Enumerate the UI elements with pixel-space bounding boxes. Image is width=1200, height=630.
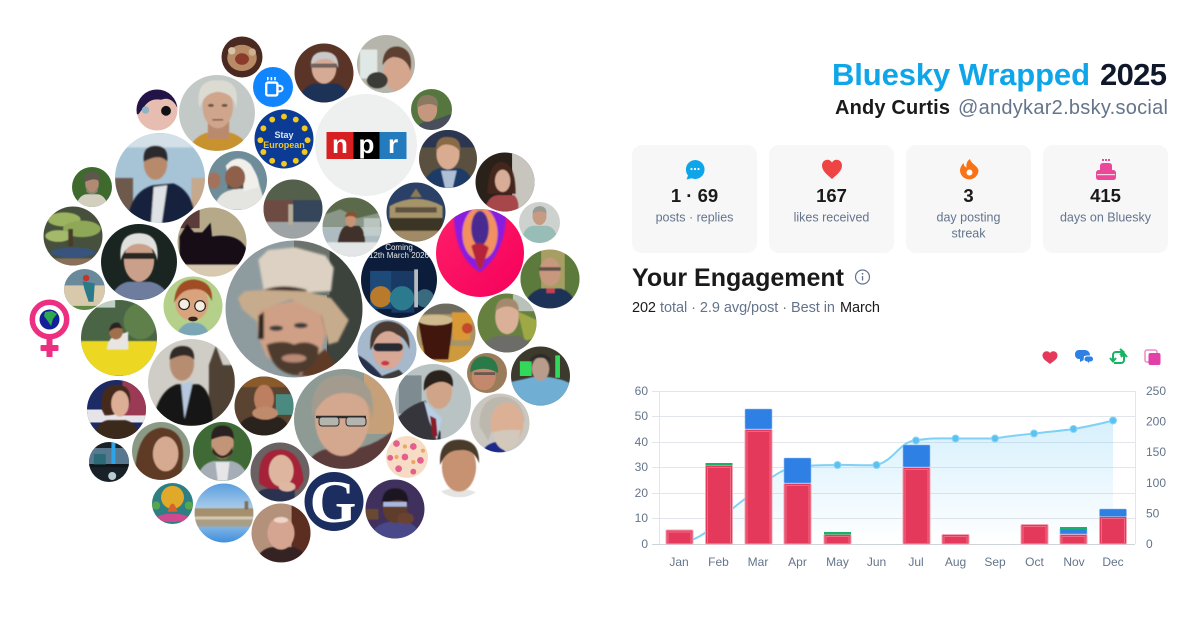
cumulative line bbox=[679, 420, 1113, 544]
avatar: NPR logo: n bbox=[332, 129, 348, 159]
panel: posts and replies stat bbox=[632, 145, 757, 253]
icon: likes heart bbox=[1042, 351, 1058, 364]
avatar: book cover Coming March 2026: Coming bbox=[385, 243, 413, 252]
avatar: grey-haired man in mustard shirt bbox=[179, 75, 255, 151]
name and handle: Andy Curtis bbox=[835, 97, 950, 119]
avatar: older man in blue shirt, green lights bbox=[511, 346, 570, 406]
avatar: curly-haired woman bbox=[132, 422, 190, 480]
avatar: Stay European badge: Stay bbox=[274, 130, 294, 140]
panel: posts and replies stat: posts · replies bbox=[656, 210, 733, 224]
avatar: NPR logo: p bbox=[359, 129, 374, 159]
avatar: older man with white beard bbox=[470, 394, 530, 452]
panel: likes received stat bbox=[769, 145, 894, 253]
right axis labels: 0 bbox=[1146, 537, 1153, 551]
panel: day posting streak stat: 3 bbox=[963, 185, 974, 206]
avatar: cartoon character with glasses bbox=[164, 276, 222, 336]
name and handle bbox=[835, 97, 1168, 119]
avatar: man with glasses and checked shirt bbox=[294, 369, 394, 469]
avatar: Stay European badge bbox=[254, 110, 314, 168]
month labels: Sep bbox=[984, 555, 1006, 569]
panel: days on Bluesky stat bbox=[1043, 145, 1168, 253]
avatar: woman in sunglasses bbox=[358, 320, 416, 378]
avatar: coffee cup icon bbox=[253, 67, 293, 107]
avatar: Stay European badge: European bbox=[263, 140, 305, 150]
avatar: pink floral pattern bbox=[386, 436, 428, 478]
left axis labels: 40 bbox=[635, 435, 648, 449]
legend icons bbox=[1042, 349, 1160, 365]
panel: likes received stat: 167 bbox=[816, 185, 847, 206]
avatar: man in top hat (largest) bbox=[226, 240, 362, 378]
cumulative area bbox=[679, 420, 1113, 544]
avatar: man in blue suit bbox=[419, 130, 477, 188]
right axis labels: 150 bbox=[1146, 445, 1166, 459]
avatar: bald young man in grey bbox=[478, 294, 536, 352]
avatar: man in white headscarf bbox=[208, 151, 267, 210]
left axis labels: 0 bbox=[641, 537, 648, 551]
month labels: Oct bbox=[1025, 555, 1044, 569]
avatar: smiling man striped jumper bbox=[519, 202, 560, 243]
avatar: man with headphones, purple background bbox=[366, 480, 424, 538]
icon: heart bbox=[822, 160, 842, 179]
title: Bluesky Wrapped 2025: 2025 bbox=[1100, 57, 1167, 92]
avatar: white-haired man in dark setting bbox=[101, 224, 177, 300]
panel: likes received stat: likes received bbox=[794, 210, 869, 224]
right axis labels: 100 bbox=[1146, 476, 1166, 490]
avatar: woman with US flag bbox=[87, 380, 146, 439]
panel: posts and replies stat: 1 · 69 bbox=[671, 185, 718, 206]
avatar: man outdoors with foliage bbox=[411, 89, 452, 130]
avatar: red curly-haired woman bbox=[250, 442, 310, 502]
name and handle: @andykar2.bsky.social bbox=[958, 97, 1168, 119]
engagement summary: total · 2.9 avg/post · Best in bbox=[660, 300, 835, 316]
bars bbox=[666, 409, 1126, 544]
engagement summary: March bbox=[840, 300, 880, 316]
right axis labels bbox=[1146, 384, 1166, 551]
avatar: small dark room bbox=[89, 442, 129, 482]
avatar: anime girl bbox=[136, 90, 178, 130]
avatar: man in dark suit with bunting bbox=[115, 133, 205, 223]
avatar: woman with dark hair bbox=[476, 152, 534, 212]
panel: day posting streak stat: day posting bbox=[937, 210, 1001, 224]
month labels: Aug bbox=[945, 555, 966, 569]
icon: replies chat bbox=[1075, 350, 1094, 365]
avatar: woman driving boat bbox=[322, 198, 382, 256]
avatar: food close-up bbox=[222, 36, 262, 78]
avatar: building rotunda bbox=[386, 182, 446, 242]
right axis labels: 200 bbox=[1146, 414, 1166, 428]
avatar: man with Big Ben tower bbox=[148, 339, 235, 426]
avatar bubble cluster bbox=[32, 35, 580, 562]
month labels: Apr bbox=[788, 555, 807, 569]
avatar: bald man with glasses bbox=[520, 250, 580, 308]
month labels: Jun bbox=[867, 555, 886, 569]
month labels: Nov bbox=[1063, 555, 1085, 569]
grid lines and axes bbox=[652, 391, 1136, 544]
icon: quotes squares bbox=[1145, 350, 1160, 365]
month labels: Feb bbox=[708, 555, 729, 569]
left axis labels: 60 bbox=[635, 384, 648, 398]
avatar: NPR logo: r bbox=[388, 129, 398, 159]
avatar: glasses of beer bbox=[416, 304, 476, 362]
line points bbox=[834, 417, 1116, 468]
panel: days on Bluesky stat: 415 bbox=[1090, 185, 1121, 206]
avatar: book cover Coming March 2026: 12th March 2026 bbox=[369, 251, 430, 260]
chart: monthly engagement stacked bars with cumulative line bbox=[635, 384, 1166, 569]
icon: info bbox=[856, 270, 870, 284]
avatar: street scene bbox=[264, 180, 322, 238]
month labels: Dec bbox=[1102, 555, 1124, 569]
left axis labels: 10 bbox=[635, 511, 648, 525]
left axis labels: 20 bbox=[635, 486, 648, 500]
avatar: NPR logo bbox=[315, 94, 417, 196]
panel: day posting streak stat bbox=[906, 145, 1031, 253]
avatar: Guardian G logo: G bbox=[310, 469, 356, 535]
month labels: Jan bbox=[669, 555, 689, 569]
right axis labels: 50 bbox=[1146, 506, 1160, 520]
avatar: man cut-out on white bbox=[439, 438, 480, 498]
engagement summary: 202 bbox=[632, 300, 656, 316]
icon: cake bbox=[1096, 159, 1116, 180]
title: Bluesky Wrapped 2025: Bluesky Wrapped bbox=[832, 57, 1090, 92]
avatar: bald man bbox=[252, 504, 310, 562]
avatar: book cover Coming March 2026 bbox=[361, 242, 437, 318]
avatar: man in green beanie bbox=[467, 353, 507, 393]
left axis labels: 50 bbox=[635, 409, 648, 423]
avatar: athlete bbox=[64, 269, 105, 310]
avatar: pink and purple abstract bbox=[436, 209, 524, 297]
panel: days on Bluesky stat: days on Bluesky bbox=[1060, 210, 1152, 224]
icon: speech bubble bbox=[686, 160, 705, 180]
avatar: Houses of Parliament reflected bbox=[194, 484, 254, 542]
avatar: man in suit with red tie bbox=[395, 364, 471, 440]
avatar: man in yellow rapeseed field bbox=[81, 300, 157, 376]
month labels: Jul bbox=[908, 555, 924, 569]
month labels: Mar bbox=[748, 555, 768, 569]
icon: flame bbox=[960, 159, 978, 179]
icon: reposts arrows bbox=[1110, 349, 1127, 363]
left axis labels bbox=[635, 384, 648, 551]
right axis labels: 250 bbox=[1146, 384, 1166, 398]
avatar: young man selfie bbox=[357, 35, 415, 93]
avatar: colourful mandala bbox=[152, 483, 193, 524]
left axis labels: 30 bbox=[635, 460, 648, 474]
icon: female symbol with Earth bbox=[32, 302, 67, 357]
avatar: man with hands clasped, warm restaurant bbox=[234, 376, 294, 436]
heading: Your Engagement: Your Engagement bbox=[632, 264, 845, 292]
avatar: bonsai tree bbox=[44, 206, 102, 266]
month labels: May bbox=[826, 555, 849, 569]
avatar: bearded man in grey suit bbox=[193, 422, 252, 481]
avatar: older man in navy hoodie bbox=[294, 44, 354, 102]
month labels bbox=[669, 555, 1124, 569]
panel: day posting streak stat: streak bbox=[951, 226, 986, 240]
avatar: bearded man with glasses bbox=[72, 167, 112, 207]
avatar: black cat bbox=[178, 208, 246, 276]
